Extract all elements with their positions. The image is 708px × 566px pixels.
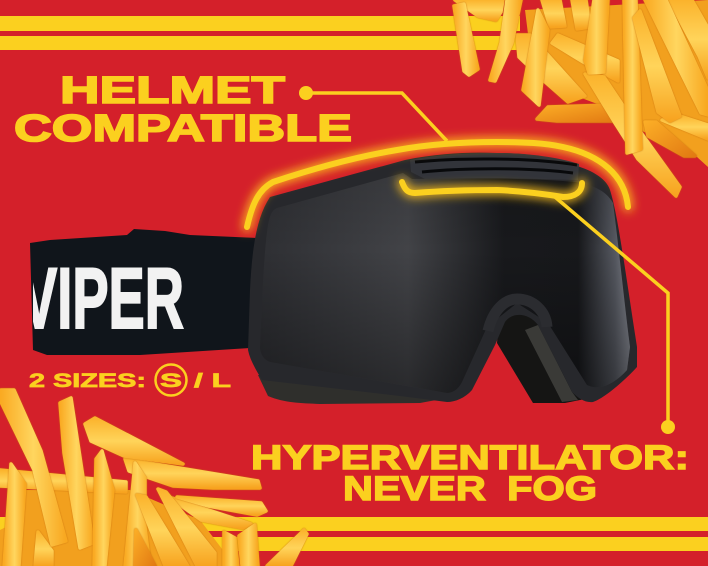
lens shading: [260, 173, 630, 393]
vents: [415, 159, 577, 173]
goggles: [248, 153, 637, 404]
size S circled: [156, 364, 186, 396]
nose arch: [488, 299, 547, 331]
heading: helmet compatible: COMPATIBLE: [14, 108, 352, 150]
vent housing: [410, 153, 579, 180]
strap logo: VIPER: [21, 251, 184, 347]
hyperventilator dot: [661, 420, 675, 434]
foam edge: [525, 325, 578, 402]
bottom stripes: [0, 517, 708, 551]
heading: hyperventilator: NEVER FOG: [343, 470, 597, 508]
goggle frame: [248, 153, 637, 402]
top stripes: [0, 16, 520, 50]
foam padding: nose: [497, 310, 590, 403]
neon glow: [247, 142, 628, 227]
lens: [260, 173, 630, 393]
helmet dot: [299, 86, 313, 100]
size S circled: S: [160, 371, 182, 392]
neon vent curve: [402, 182, 582, 197]
callout line: hyperventilator: [555, 197, 675, 434]
fries: bottom left: [0, 390, 307, 566]
foam padding: bottom: [258, 375, 447, 404]
sizes: / L: [194, 371, 232, 392]
heading: helmet compatible: [14, 70, 352, 150]
heading: hyperventilator: HYPERVENTILATOR:: [251, 439, 689, 477]
neon helmet curve: [247, 142, 628, 227]
callout line: helmet compatible: [299, 86, 447, 141]
heading: hyperventilator: [251, 439, 689, 508]
heading: helmet compatible: HELMET: [60, 70, 285, 112]
sizes: 2 SIZES:: [29, 371, 146, 392]
sizes: [29, 364, 232, 396]
fries: top right: [454, 0, 708, 196]
goggle strap: [21, 229, 257, 355]
